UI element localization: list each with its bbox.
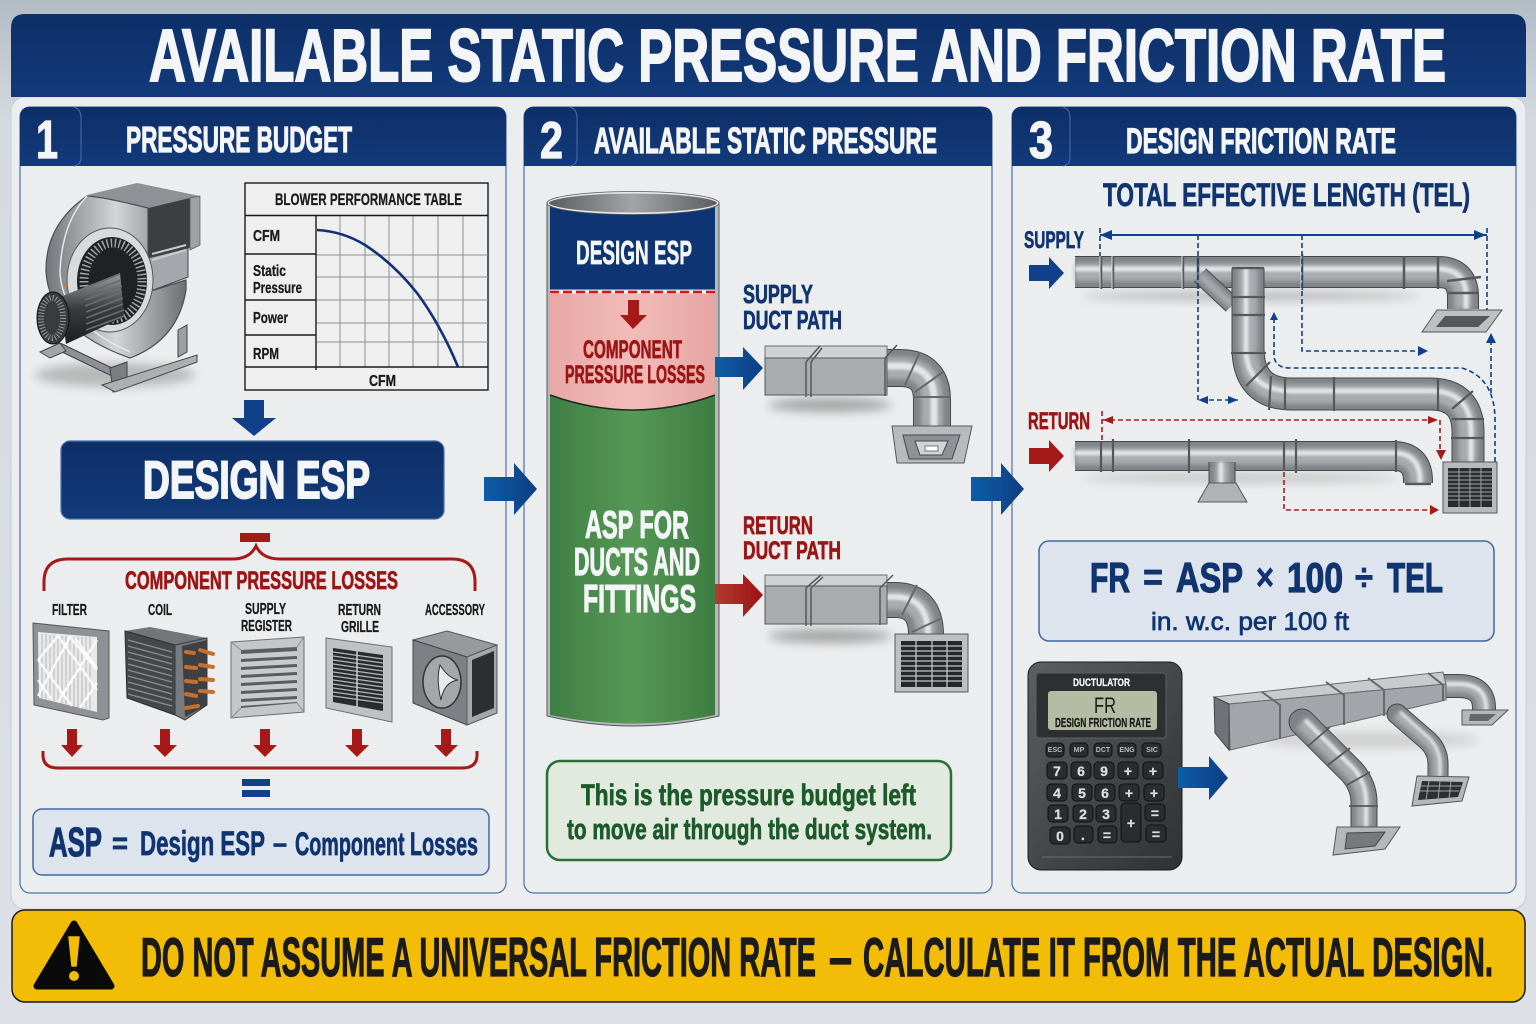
branch to supply diffuser	[1302, 720, 1400, 855]
calculator keys: SIC	[1146, 747, 1158, 754]
calculator keys: 6	[1101, 785, 1109, 801]
panel 1 header: 1	[36, 110, 58, 170]
blower performance table	[245, 183, 488, 390]
FR formula box: FR	[1090, 554, 1130, 601]
pressure budget cylinder: PRESSURE LOSSES	[565, 361, 705, 389]
blower performance table: CFM	[369, 373, 396, 390]
branch fitting	[1200, 275, 1232, 305]
calculator keys: .	[1081, 827, 1085, 843]
calculator keys: +	[1150, 785, 1158, 801]
title banner	[11, 14, 1526, 97]
calculator: ductulator: FR	[1094, 693, 1116, 718]
green section: ASP	[550, 395, 715, 724]
message box: pressure budget left: This is the pressure budget left	[581, 779, 916, 812]
blower performance table: BLOWER PERFORMANCE TABLE	[275, 190, 462, 209]
blower performance table: Pressure	[253, 280, 302, 297]
arrow: supply	[715, 347, 763, 390]
return duct path label	[743, 512, 841, 565]
FR formula box: in. w.c. per 100 ft	[1151, 608, 1349, 636]
calculator keys: 1	[1054, 806, 1062, 822]
branch pipe	[1231, 268, 1484, 462]
bottom brace	[43, 751, 477, 768]
supply duct path label: DUCT PATH	[743, 305, 842, 335]
component labels	[52, 601, 485, 636]
panel 2: available static pressure	[524, 107, 992, 893]
panel 1: pressure budget	[20, 107, 506, 893]
panel 2 header: 2	[540, 112, 563, 170]
FR formula box: ×	[1256, 557, 1274, 599]
return duct with grille	[765, 575, 968, 692]
panel 2 header: AVAILABLE STATIC PRESSURE	[594, 120, 937, 161]
return grille	[1443, 462, 1497, 513]
arrow: supply in	[1029, 257, 1064, 289]
calculator keys: 5	[1078, 785, 1086, 801]
main board	[11, 97, 1526, 909]
component labels: RETURN	[338, 602, 381, 619]
arrow in pink section	[620, 300, 647, 329]
calculator: ductulator: DESIGN FRICTION RATE	[1055, 715, 1151, 730]
message box: pressure budget left: to move air through the duct system.	[567, 814, 932, 846]
calculator keys: 0	[1056, 828, 1064, 844]
arrow: panel 1 to panel 2	[484, 463, 537, 515]
panel 2 header	[524, 107, 992, 170]
pressure budget cylinder: FITTINGS	[583, 578, 696, 621]
arrow: panel 2 to panel 3	[971, 463, 1024, 515]
FR formula box: ÷	[1355, 557, 1373, 599]
component labels: GRILLE	[341, 619, 379, 636]
blower performance table: Power	[253, 310, 288, 327]
red down arrows	[61, 729, 458, 757]
calculator keys: +	[1124, 763, 1132, 779]
icon: warning triangle	[37, 924, 111, 986]
pressure budget cylinder: DESIGN ESP	[576, 234, 692, 271]
panel 3 header	[1012, 107, 1516, 170]
message box: pressure budget left	[547, 761, 951, 860]
panel 3 header: DESIGN FRICTION RATE	[1126, 122, 1396, 161]
TEL duct diagram	[1075, 228, 1502, 515]
rectangular trunk	[1214, 672, 1446, 750]
ASP formula box: ASP	[49, 819, 102, 865]
blower performance table: Static	[253, 263, 286, 280]
icon: filter	[33, 623, 109, 720]
calculator: ductulator: DUCTULATOR	[1073, 677, 1130, 689]
arrow: return in	[1029, 440, 1064, 472]
return label: RETURN	[1028, 408, 1090, 435]
calculator keys: 4	[1053, 785, 1061, 801]
icon: centrifugal blower	[35, 183, 200, 392]
pressure budget cylinder	[547, 192, 719, 726]
calculator keys: 3	[1102, 806, 1110, 822]
heading: component pressure losses: COMPONENT PRESSURE LOSSES	[125, 567, 398, 595]
icon: supply register	[231, 637, 304, 718]
FR formula box: ASP	[1176, 554, 1243, 601]
pressure budget cylinder: COMPONENT	[583, 336, 682, 364]
design ESP button	[61, 441, 444, 519]
calculator keys	[1046, 743, 1166, 844]
component labels: SUPPLY	[245, 601, 286, 618]
supply TEL dimension lines	[1100, 228, 1496, 462]
component labels: ACCESSORY	[425, 602, 485, 619]
supply duct path label	[743, 279, 842, 335]
FR formula box: 100	[1287, 554, 1343, 601]
supply label: SUPPLY	[1024, 227, 1084, 254]
equals sign	[242, 779, 270, 797]
icon: coil	[125, 627, 213, 720]
panel 1 header: PRESSURE BUDGET	[126, 119, 352, 160]
return duct path label: DUCT PATH	[743, 537, 841, 565]
panel 3: design friction rate	[1012, 107, 1516, 893]
return duct path label: RETURN	[743, 512, 813, 540]
ASP formula box: –	[273, 827, 287, 860]
component labels: REGISTER	[241, 618, 292, 635]
far elbow	[1440, 684, 1508, 725]
calculator keys: DCT	[1096, 747, 1111, 754]
calculator keys: +	[1149, 763, 1157, 779]
pressure budget cylinder: DUCTS AND	[574, 541, 700, 584]
icon: return grille	[326, 638, 392, 722]
warning text: —	[830, 926, 851, 988]
icon: accessory damper	[413, 631, 497, 725]
ASP formula box: Component Losses	[295, 826, 478, 862]
calculator keys: ESC	[1048, 747, 1062, 754]
calculator keys: 9	[1100, 763, 1108, 779]
top brace	[44, 546, 475, 591]
ASP formula box: Design ESP	[140, 825, 265, 863]
calculator keys: 2	[1079, 806, 1087, 822]
minus sign	[240, 533, 270, 542]
pressure budget cylinder: ASP FOR	[585, 504, 689, 547]
calculator keys: =	[1152, 826, 1160, 842]
return TEL dimension lines	[1102, 411, 1446, 515]
design ESP button: DESIGN ESP	[143, 451, 370, 510]
ASP formula box	[33, 809, 489, 875]
calculator keys: ENG	[1119, 747, 1135, 754]
component labels: COIL	[148, 602, 172, 619]
supply trunk	[1075, 254, 1481, 309]
component labels: FILTER	[52, 602, 87, 619]
calculator keys: 7	[1053, 763, 1061, 779]
calculator keys: MP	[1074, 747, 1085, 754]
branch to return grille	[1397, 712, 1469, 806]
arrow: return	[715, 574, 763, 617]
blower performance table: RPM	[253, 346, 279, 363]
calculator keys: =	[1103, 827, 1111, 843]
return drop	[1198, 462, 1247, 502]
warning text: DO NOT ASSUME A UNIVERSAL FRICTION RATE	[141, 926, 816, 988]
calculator keys: 6	[1077, 763, 1085, 779]
pink section: component losses	[550, 291, 715, 410]
arrow: table to design ESP	[232, 400, 276, 436]
calculator keys: =	[1151, 805, 1159, 821]
navy section: design ESP	[550, 203, 715, 291]
arrow: calculator to ducts	[1178, 756, 1228, 800]
supply diffuser	[1422, 310, 1502, 332]
supply duct path label: SUPPLY	[743, 279, 813, 309]
supply duct with register	[765, 345, 972, 463]
diffuser slots	[1436, 316, 1490, 327]
calculator: ductulator	[1028, 662, 1182, 870]
FR formula box: TEL	[1387, 554, 1443, 601]
panel 3 header: 3	[1029, 112, 1053, 170]
ASP formula box: =	[112, 827, 128, 860]
calculator keys: +	[1127, 815, 1135, 831]
FR formula box	[1039, 541, 1494, 641]
sized duct system	[1214, 672, 1508, 855]
FR formula box: =	[1143, 557, 1163, 599]
return trunk	[1075, 439, 1431, 484]
panel 1 header	[20, 107, 506, 170]
warning banner	[12, 910, 1525, 1002]
calculator keys: +	[1125, 785, 1133, 801]
performance curve	[317, 230, 458, 367]
blower performance table: CFM	[253, 228, 280, 245]
